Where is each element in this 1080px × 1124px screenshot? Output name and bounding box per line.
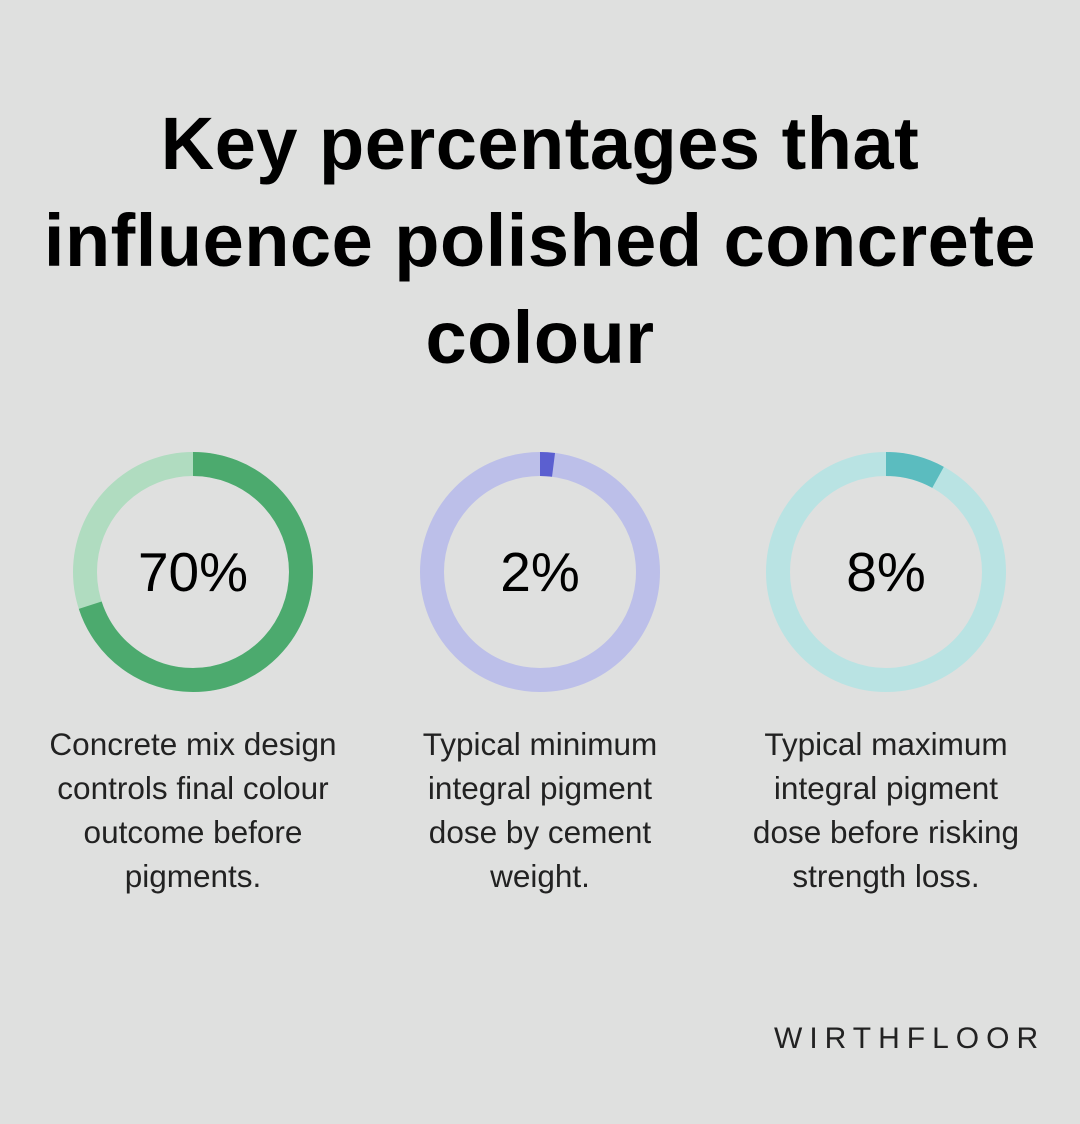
value: 70% <box>138 541 248 603</box>
title: Key percentages that <box>161 102 919 185</box>
brand logo: WIRTHFLOOR <box>774 1022 1045 1055</box>
panel: 2% <box>420 452 660 894</box>
panel: 70% <box>49 452 337 894</box>
description: Concrete mix design controls final colour outcome before pigments. <box>49 726 337 894</box>
panel: 8% <box>753 452 1019 894</box>
donut chart: 70% <box>73 452 313 692</box>
title <box>44 102 1036 379</box>
value: 8% <box>846 541 926 603</box>
title: influence polished concrete <box>44 199 1036 282</box>
description: Typical maximum integral pigment dose before risking strength loss. <box>753 726 1019 894</box>
description: Typical minimum integral pigment dose by cement weight. <box>423 726 657 894</box>
donut chart: 2% <box>420 452 660 692</box>
value: 2% <box>500 541 580 603</box>
donut chart: 8% <box>766 452 1006 692</box>
title: colour <box>425 296 655 379</box>
